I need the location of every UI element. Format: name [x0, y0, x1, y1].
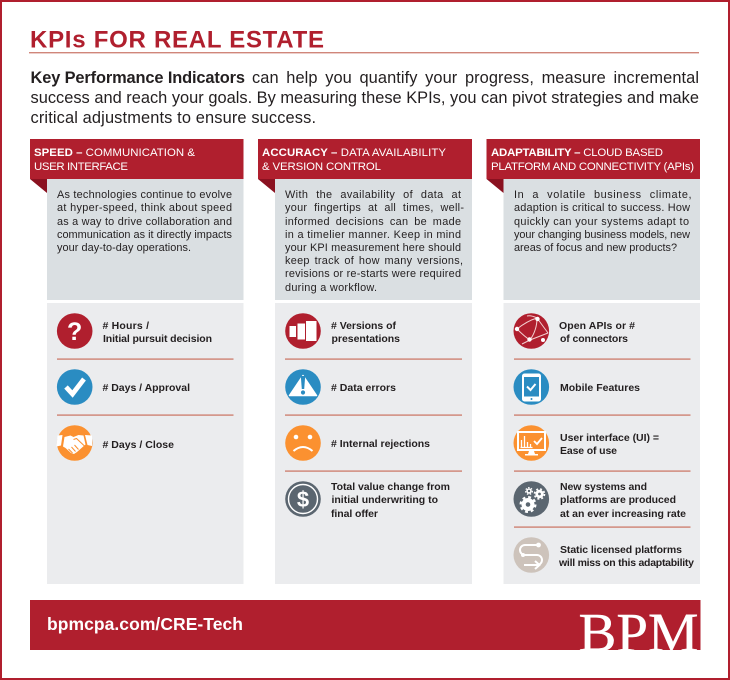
kpi: total value change	[331, 481, 450, 520]
speed header: USER INTERFACE	[34, 161, 128, 173]
icon: sad face	[285, 425, 321, 461]
accuracy description: your fingertips at all times, well-	[285, 202, 464, 214]
adaptability header: PLATFORM AND CONNECTIVITY (APIs)	[491, 161, 694, 173]
kpi: total value change: Total value change from	[331, 481, 450, 493]
icon: question mark: ?	[67, 318, 82, 346]
kpi: new systems: platforms are produced	[560, 494, 676, 506]
icon: mobile phone	[514, 369, 549, 405]
adaptability description: your changing business models, new	[514, 229, 690, 241]
footer url: bpmcpa.com/CRE-Tech	[47, 614, 243, 634]
icon: monitor chart	[514, 425, 549, 461]
speed description: as a way to drive collaboration and	[57, 216, 232, 228]
intro text	[30, 69, 699, 127]
kpi: approval: # Days / Approval	[102, 382, 190, 394]
kpi: open APIs: Open APIs or #	[559, 320, 635, 332]
intro text: critical adjustments to ensure success.	[30, 109, 316, 127]
kpi: close: # Days / Close	[102, 439, 174, 451]
icon: check mark	[57, 369, 92, 405]
kpi: hours: # Hours /	[102, 320, 149, 332]
panel: speed	[30, 139, 244, 584]
adaptability description	[504, 179, 700, 300]
adaptability description: In a volatile business climate,	[514, 189, 692, 201]
adaptability description: areas of focus and new products?	[514, 242, 677, 254]
icon: handshake	[56, 425, 92, 461]
kpi: user interface: User interface (UI) =	[560, 432, 659, 444]
kpi: internal rejections: # Internal rejections	[331, 438, 430, 450]
icon: dollar: $	[297, 487, 309, 512]
kpi: open APIs	[559, 320, 635, 345]
accuracy description: With the availability of data at	[285, 189, 461, 201]
kpi: versions	[331, 320, 400, 345]
icon: dollar	[285, 481, 321, 517]
intro text: Key Performance Indicators	[30, 69, 245, 87]
accuracy description: revisions or re-starts were required	[285, 268, 461, 280]
accuracy description	[275, 179, 472, 300]
kpi: new systems	[560, 481, 686, 520]
accuracy description: during a workflow.	[285, 282, 377, 294]
kpi: static platforms: Static licensed platforms	[560, 544, 682, 556]
icon: warning triangle	[285, 369, 321, 405]
speed description	[47, 179, 244, 300]
speed description: communication as it directly impacts	[57, 229, 233, 241]
accuracy description: informed decisions can be made	[285, 216, 461, 228]
accuracy description: in a timelier manner. Keep in mind	[285, 229, 461, 241]
kpi: new systems: at an ever increasing rate	[560, 508, 686, 520]
kpi: versions: presentations	[332, 333, 400, 345]
panel: accuracy	[258, 139, 472, 584]
kpi: user interface	[560, 432, 659, 457]
icon: gears	[514, 481, 549, 517]
accuracy description: your KPI measurement here should	[285, 242, 461, 254]
kpi: data errors: # Data errors	[331, 382, 396, 394]
kpi: static platforms	[558, 544, 694, 569]
speed KPI list	[47, 303, 244, 584]
kpi: hours	[102, 320, 212, 345]
kpi: new systems: New systems and	[560, 481, 647, 493]
speed header: SPEED – COMMUNICATION &	[34, 147, 195, 159]
speed description: your day-to-day operations.	[57, 242, 191, 254]
intro text: can help you quantify your progress, measure incremental	[252, 69, 699, 87]
kpi: open APIs: of connectors	[560, 333, 628, 345]
footer banner	[30, 600, 700, 650]
kpi: total value change: initial underwriting to	[332, 494, 438, 506]
adaptability description: adaption is critical to success. How	[514, 202, 690, 214]
icon: presentations	[285, 313, 321, 349]
icon: question mark	[57, 313, 92, 349]
icon: workflow path	[514, 537, 549, 573]
adaptability header	[486, 139, 700, 193]
accuracy header: & VERSION CONTROL	[262, 161, 381, 173]
kpi: mobile features: Mobile Features	[560, 382, 640, 394]
adaptability KPI list	[504, 303, 700, 584]
kpi: static platforms: will miss on this adaptability	[558, 557, 694, 569]
speed description: at hyper-speed, think about speed	[57, 202, 232, 214]
adaptability header: ADAPTABILITY – CLOUD BASED	[491, 147, 663, 159]
kpi: hours: Initial pursuit decision	[103, 333, 212, 345]
accuracy description: keep track of how many versions,	[285, 255, 463, 267]
kpi: user interface: Ease of use	[560, 445, 617, 457]
accuracy header	[258, 139, 472, 193]
kpi: total value change: final offer	[331, 508, 378, 520]
speed header	[30, 139, 244, 193]
panel: adaptability	[486, 139, 700, 584]
icon: network globe	[514, 313, 549, 349]
accuracy header: ACCURACY – DATA AVAILABILITY	[262, 147, 446, 159]
accuracy KPI list	[275, 303, 472, 584]
adaptability description: quickly can your systems adapt to	[514, 216, 689, 228]
title: KPIs FOR REAL ESTATE	[30, 26, 324, 53]
logo: BPM: BPM	[578, 602, 698, 663]
speed description: As technologies continue to evolve	[57, 189, 232, 201]
kpi: versions: # Versions of	[331, 320, 396, 332]
intro text: success and reach your goals. By measuring these KPIs, you can pivot strategies and make	[30, 89, 699, 107]
